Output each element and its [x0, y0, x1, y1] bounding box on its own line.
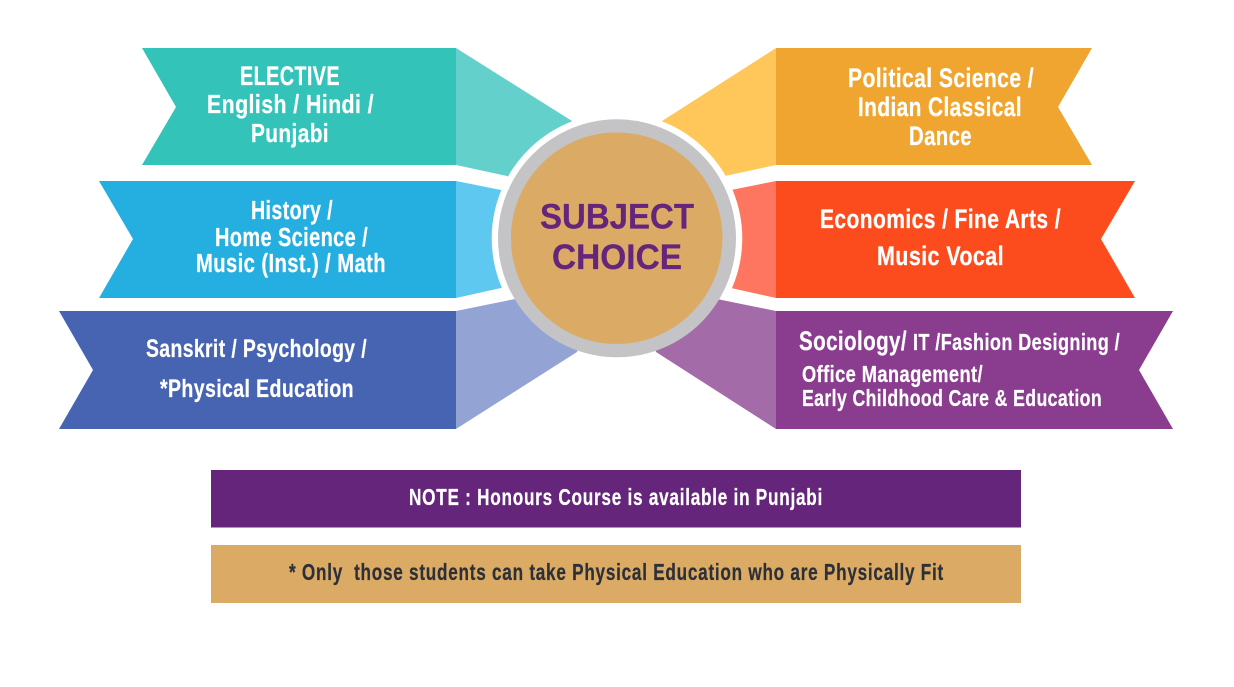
note: physical education condition: * Only those students can take Physical Education who are Physically Fit [289, 559, 944, 585]
text: elective subjects [207, 61, 374, 148]
text: sanskrit subjects [146, 335, 367, 403]
text: economics subjects: Economics / Fine Arts / [820, 204, 1061, 234]
connector: amber [617, 48, 776, 238]
text: sociology subjects [799, 326, 1120, 411]
text: sociology subjects: Sociology/ [799, 326, 907, 356]
panel: sanskrit and psychology [59, 238, 617, 429]
text: political science subjects: Indian Classical [858, 92, 1022, 122]
panel: economics and fine arts [617, 181, 1135, 298]
panel: history and home science [99, 181, 617, 298]
text: elective subjects: English / Hindi / [207, 89, 374, 119]
ribbon: violet [776, 311, 1173, 429]
text: sociology subjects: Office Management/ [802, 361, 983, 387]
text: sanskrit subjects: *Physical Education [160, 375, 354, 403]
text: economics subjects [820, 204, 1061, 271]
text: history subjects: History / [251, 197, 333, 225]
connector: sky blue [456, 181, 617, 298]
connector: teal [456, 48, 617, 238]
panel: political science and dance [617, 48, 1092, 238]
heading: subject choice: CHOICE [552, 238, 682, 277]
ribbon: sky blue [99, 181, 456, 298]
note: physical education condition [211, 545, 1021, 603]
panel: sociology and vocational [617, 238, 1173, 429]
ribbon: indigo [59, 311, 456, 429]
note: honours course [211, 470, 1021, 528]
text: history subjects [196, 197, 386, 278]
center badge: subject choice [498, 119, 736, 357]
text: political science subjects: Political Science / [848, 63, 1034, 93]
ribbon: amber [776, 48, 1092, 165]
text: political science subjects [848, 63, 1034, 151]
panel: elective languages [142, 48, 617, 238]
ribbon: orange red [776, 181, 1135, 298]
text: elective subjects: Punjabi [251, 118, 329, 148]
heading: subject choice [540, 197, 694, 277]
text: elective subjects: ELECTIVE [240, 61, 340, 91]
connector: coral [617, 181, 776, 298]
text: economics subjects: Music Vocal [877, 241, 1004, 271]
text: sociology subjects: IT /Fashion Designing / [913, 329, 1120, 355]
text: history subjects: Home Science / [215, 224, 368, 252]
text: political science subjects: Dance [909, 121, 972, 151]
text: sanskrit subjects: Sanskrit / Psychology / [146, 335, 367, 363]
connector: violet [617, 238, 776, 429]
connector: indigo [456, 238, 617, 429]
text: history subjects: Music (Inst.) / Math [196, 250, 386, 278]
text: sociology subjects: Early Childhood Care & Education [802, 385, 1102, 411]
ribbon: teal [142, 48, 456, 165]
heading: subject choice: SUBJECT [540, 197, 694, 236]
note: honours course: NOTE : Honours Course is available in Punjabi [409, 484, 823, 510]
